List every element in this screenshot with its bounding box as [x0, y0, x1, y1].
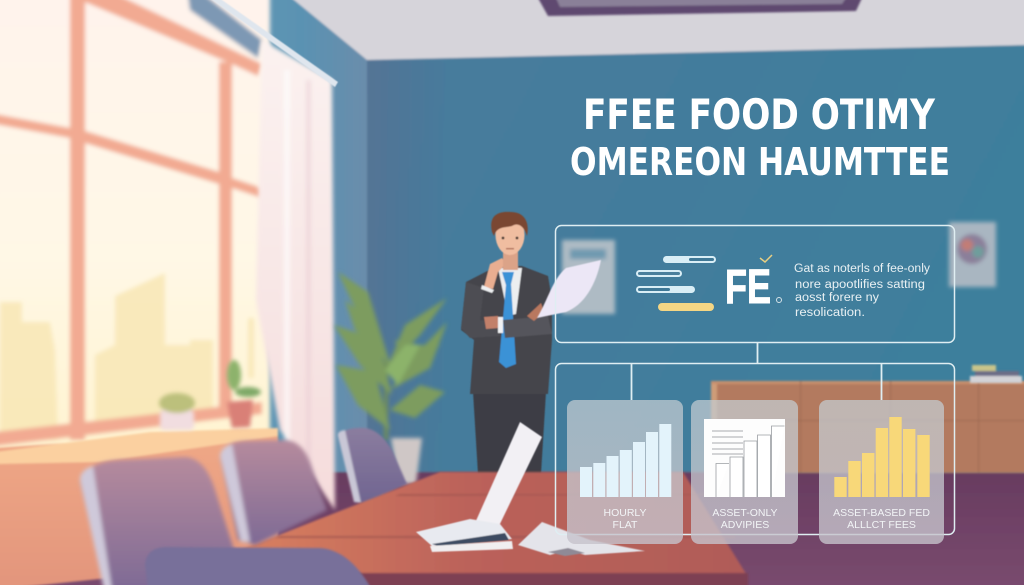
chair 3: [338, 428, 407, 505]
FE mark: FE: [725, 261, 771, 314]
curtain: [256, 40, 335, 510]
card label: ASSET-BASED FED: [833, 507, 930, 519]
hand on chin: [484, 258, 506, 289]
window: [0, 0, 270, 465]
lower wall and sill: [0, 428, 278, 585]
wall pictures: [562, 222, 996, 314]
title: [570, 90, 950, 184]
chair 2: [220, 440, 327, 545]
jacket: [461, 266, 552, 394]
card: hourly flat: [567, 400, 683, 544]
card label: ASSET-ONLY: [712, 507, 778, 519]
panel description: aosst forere ny: [795, 292, 879, 304]
neck: [503, 252, 518, 270]
plant and pot: [334, 272, 447, 484]
left sleeve: [461, 282, 500, 338]
card: asset-only advisers: [691, 400, 798, 544]
window plants: [159, 360, 261, 430]
books on cabinet: [970, 365, 1022, 383]
cuff: [481, 285, 494, 293]
curtain rod: [205, 0, 338, 87]
skyline: [0, 273, 254, 440]
floating paper: [537, 260, 601, 318]
chair front: [145, 547, 372, 585]
chair 1: [80, 457, 236, 585]
right hand: [527, 303, 544, 321]
tie: [499, 272, 516, 368]
card: asset-based fees: [819, 400, 944, 544]
card label: [604, 507, 646, 531]
table: [240, 472, 748, 585]
forearm hand: [484, 316, 499, 329]
face: [496, 215, 524, 255]
table papers: [416, 422, 645, 556]
card label: HOURLY: [604, 507, 646, 519]
card label: [833, 507, 930, 531]
card label: [712, 507, 778, 531]
card label: ALLLCT FEES: [847, 519, 916, 531]
bar chart: [834, 417, 930, 497]
title: FFEE FOOD OTIMY: [583, 90, 935, 139]
title: OMEREON HAUMTTEE: [570, 140, 950, 184]
panel description: Gat as noterls of fee-only: [794, 263, 930, 275]
card label: ADVIPIES: [721, 519, 769, 531]
shirt: [498, 268, 522, 316]
icon: progress pills: [636, 256, 716, 311]
card label: FLAT: [613, 519, 638, 531]
bar chart: [580, 424, 671, 497]
hair: [491, 212, 528, 236]
shirt cuff: [498, 317, 503, 333]
panel description: nore apootlifies satting: [795, 279, 925, 291]
panel description: [794, 263, 930, 319]
window frame: [0, 0, 262, 446]
connectors and lower panel: [556, 342, 954, 534]
document chart: [704, 419, 785, 497]
cabinet: [711, 381, 1024, 473]
legs: [473, 392, 546, 474]
man: [461, 212, 552, 474]
panel description: resolication.: [795, 307, 865, 319]
ceiling light: [538, 0, 862, 16]
forearm sleeve: [503, 316, 552, 338]
top panel: [556, 226, 954, 342]
